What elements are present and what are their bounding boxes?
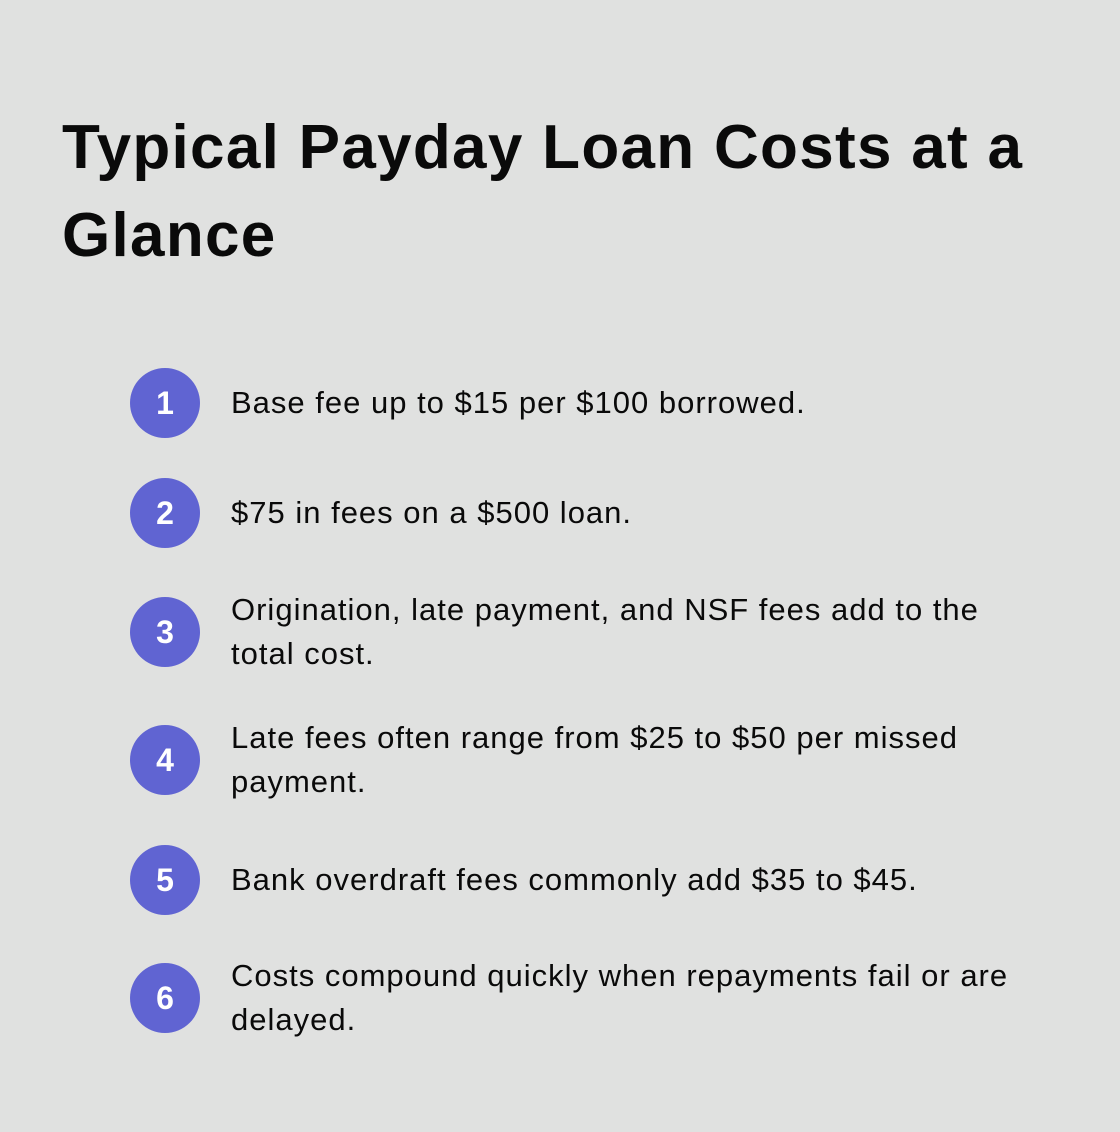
item 5	[130, 845, 918, 915]
text 6: Costs compound quickly when repayments fail or are	[231, 958, 1008, 993]
circle 4	[130, 725, 200, 795]
text 3	[231, 592, 979, 671]
title	[62, 113, 1023, 270]
item 6	[130, 958, 1008, 1037]
item 4	[130, 720, 958, 799]
title: Glance	[62, 201, 277, 270]
circle 3	[130, 597, 200, 667]
circle 1: 1	[156, 385, 174, 421]
text 6	[231, 958, 1008, 1037]
circle 2: 2	[156, 495, 174, 531]
text 4: payment.	[231, 764, 367, 799]
text 3: total cost.	[231, 636, 375, 671]
item 3	[130, 592, 979, 671]
title: Typical Payday Loan Costs at a	[62, 113, 1023, 182]
item 1	[130, 368, 806, 438]
text 1: Base fee up to $15 per $100 borrowed.	[231, 385, 806, 420]
circle 5	[130, 845, 200, 915]
circle 3: 3	[156, 614, 174, 650]
circle 1	[130, 368, 200, 438]
circle 2	[130, 478, 200, 548]
circle 4: 4	[156, 742, 174, 778]
text 5: Bank overdraft fees commonly add $35 to $45.	[231, 862, 918, 897]
text 3: Origination, late payment, and NSF fees add to the	[231, 592, 979, 627]
item 2	[130, 478, 632, 548]
text 2: $75 in fees on a $500 loan.	[231, 495, 632, 530]
circle 6	[130, 963, 200, 1033]
text 4: Late fees often range from $25 to $50 per missed	[231, 720, 958, 755]
text 4	[231, 720, 958, 799]
circle 5: 5	[156, 862, 174, 898]
circle 6: 6	[156, 980, 174, 1016]
text 6: delayed.	[231, 1002, 356, 1037]
